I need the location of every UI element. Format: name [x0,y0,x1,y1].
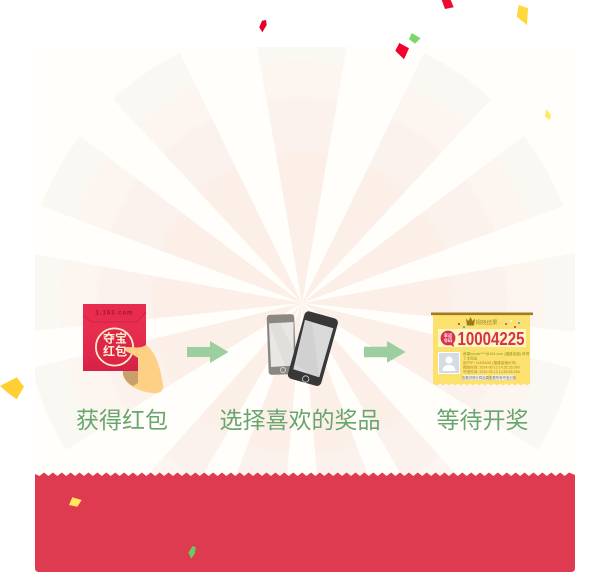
panel: red footer band with scalloped edge [35,472,575,572]
winning number: 10004225 [458,329,524,349]
seal text top: 夺宝 [103,330,127,346]
arrow 2 [364,341,406,363]
panel: cream sunburst background [35,47,575,476]
envelope seal [96,328,133,366]
winning number band [438,329,526,347]
crown [466,317,475,326]
hand [123,345,163,393]
icon: red envelope with hand [83,304,163,393]
icon: two smartphones [267,310,339,387]
envelope url text: 1.163.com [95,310,134,316]
seal text bottom: 红包 [103,344,127,358]
step label 2: 选择喜欢的奖品 [220,407,380,433]
winner details: 夺宝时间: 2014-05-13 14:50:55.555 [463,369,520,374]
winner details [463,351,530,374]
red badge: 号码 [444,337,452,344]
confetti dots [458,320,520,328]
winner details: 用户IP: 114/59/66 (福建省福州市) [463,360,516,365]
arrow 1 [187,341,228,363]
palm shadow [123,371,138,386]
red badge [441,331,455,347]
winner details: 恭喜henab****@163.com (福建省福) 获得 [463,351,530,356]
gray phone [267,314,296,375]
avatar [438,352,460,374]
step label 1: 获得红包 [76,407,168,433]
winner details: 了本商品 [463,356,478,360]
ticket title: 揭晓结果 [475,318,498,326]
icon: lottery result ticket [431,312,533,386]
winner details: 揭晓时间: 2014-05-13 14:52:35.000 [463,364,520,370]
ticket buttons: 查看详情计算结果 [462,375,490,380]
ticket buttons: 查看所有夺宝记录 [489,375,517,380]
step label 3: 等待开奖 [436,407,528,433]
ticket buttons [462,375,517,380]
red badge: 幸运 [444,332,453,339]
black phone [287,310,339,387]
